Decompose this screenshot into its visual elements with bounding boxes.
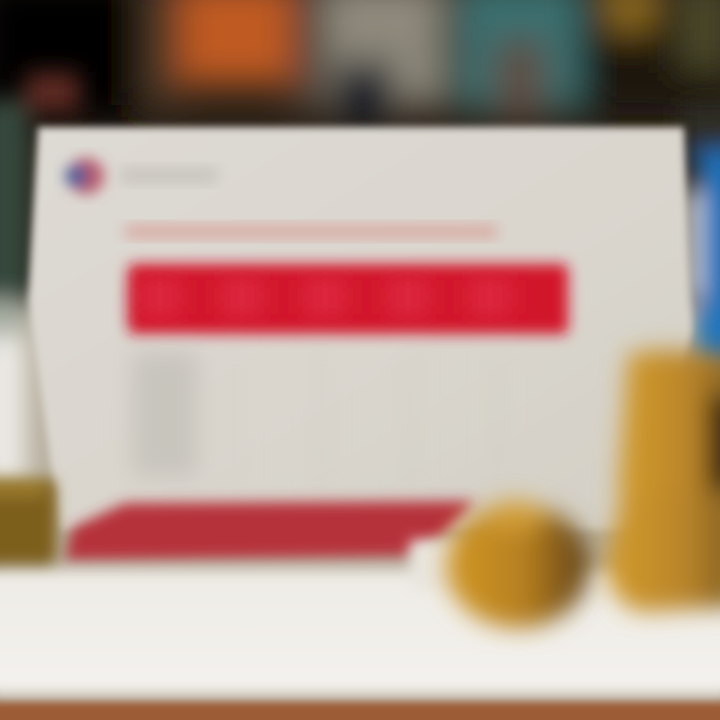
table surface [0, 540, 720, 720]
panel: red lower strip [65, 501, 475, 560]
icon: coin stack right [606, 350, 720, 612]
panel: red banner [128, 264, 568, 334]
chart: faint table [132, 345, 499, 490]
icon: coins left [0, 478, 56, 564]
background: left side objects [0, 72, 80, 485]
panel: white card [28, 127, 692, 560]
heading: blurred pink title [125, 224, 497, 239]
table edge [0, 702, 720, 720]
icon: coin stack centre [446, 501, 590, 628]
background: right side [680, 105, 720, 365]
icon: round logo [65, 158, 104, 194]
heading: blurred logo text [120, 167, 218, 184]
